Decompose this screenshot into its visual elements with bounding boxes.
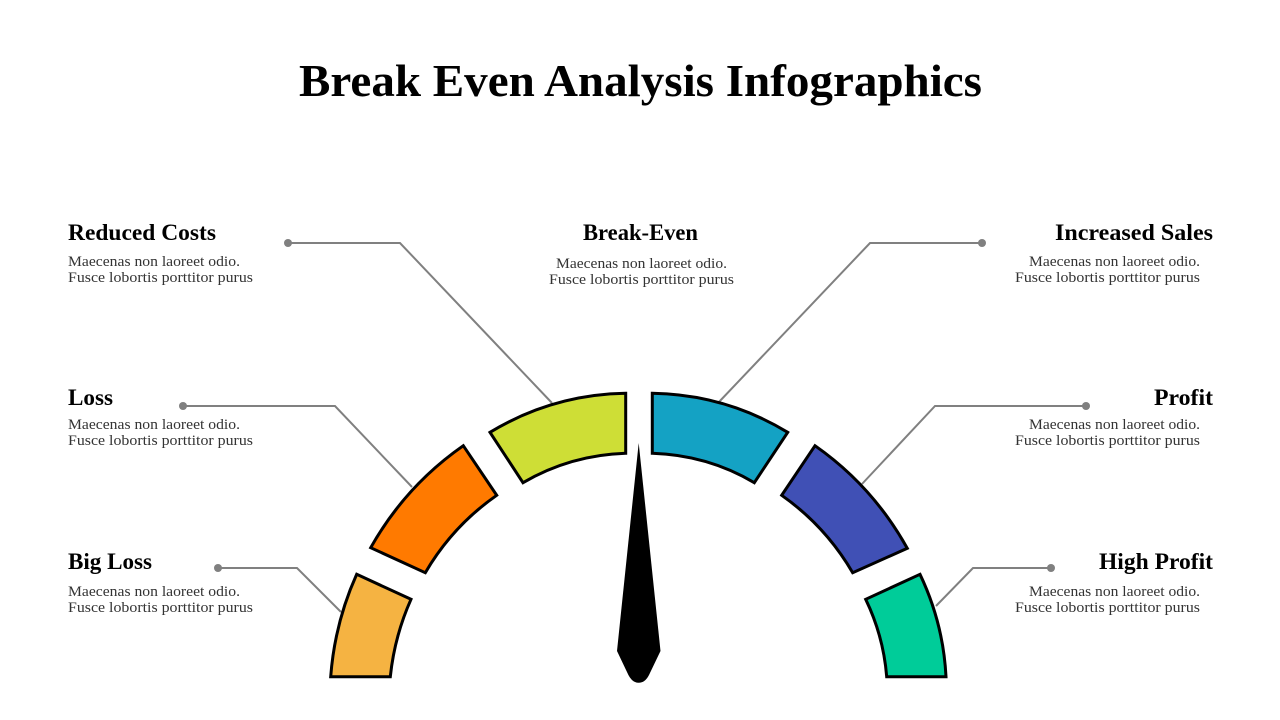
heading: increased sales: Increased Sales	[1055, 220, 1213, 245]
heading: reduced costs: Reduced Costs	[68, 220, 216, 245]
text: high profit description	[1015, 584, 1200, 616]
heading: big loss: Big Loss	[68, 549, 152, 574]
connector: high profit	[936, 564, 1055, 606]
panel: loss	[68, 385, 253, 449]
text: profit description: Fusce lobortis porttitor purus	[1015, 433, 1200, 449]
text: reduced costs description: Maecenas non laoreet odio.	[68, 254, 240, 270]
heading: profit: Profit	[1154, 385, 1213, 410]
text: break-even description: Maecenas non laoreet odio.	[556, 256, 727, 272]
text: big loss description: Maecenas non laoreet odio.	[68, 584, 240, 600]
text: reduced costs description: Fusce lobortis porttitor purus	[68, 270, 253, 286]
panel: high profit	[1015, 549, 1213, 616]
panel: break-even	[549, 220, 734, 288]
panel: profit	[1015, 385, 1213, 449]
gauge segment: loss	[371, 446, 497, 573]
connector: increased sales	[718, 239, 986, 403]
title: Break Even Analysis Infographics	[299, 55, 982, 106]
gauge needle	[617, 443, 660, 683]
panel: big loss	[68, 549, 253, 616]
gauge segment: reduced costs	[490, 393, 626, 483]
text: high profit description: Maecenas non laoreet odio.	[1029, 584, 1200, 600]
text: big loss description: Fusce lobortis porttitor purus	[68, 600, 253, 616]
connector: reduced costs	[284, 239, 552, 403]
text: loss description: Fusce lobortis porttitor purus	[68, 433, 253, 449]
heading: loss: Loss	[68, 385, 113, 410]
heading: high profit: High Profit	[1099, 549, 1213, 574]
text: big loss description	[68, 584, 253, 616]
text: loss description	[68, 417, 253, 449]
text: profit description	[1015, 417, 1200, 449]
text: profit description: Maecenas non laoreet odio.	[1029, 417, 1200, 433]
text: break-even description: Fusce lobortis porttitor purus	[549, 272, 734, 288]
heading: break-even: Break-Even	[583, 220, 698, 245]
gauge segment: big loss	[331, 574, 411, 677]
panel: reduced costs	[68, 220, 253, 286]
connector: big loss	[214, 564, 341, 612]
text: break-even description	[549, 256, 734, 288]
connector: profit	[862, 402, 1090, 484]
text: increased sales description	[1015, 254, 1200, 286]
text: increased sales description: Maecenas non laoreet odio.	[1029, 254, 1200, 270]
gauge segment: high profit	[866, 574, 946, 677]
text: high profit description: Fusce lobortis porttitor purus	[1015, 600, 1200, 616]
panel: increased sales	[1015, 220, 1213, 286]
connector: loss	[179, 402, 412, 487]
text: reduced costs description	[68, 254, 253, 286]
text: increased sales description: Fusce lobortis porttitor purus	[1015, 270, 1200, 286]
gauge segment: profit	[782, 446, 907, 573]
gauge segment: increased sales	[652, 393, 788, 483]
text: loss description: Maecenas non laoreet odio.	[68, 417, 240, 433]
